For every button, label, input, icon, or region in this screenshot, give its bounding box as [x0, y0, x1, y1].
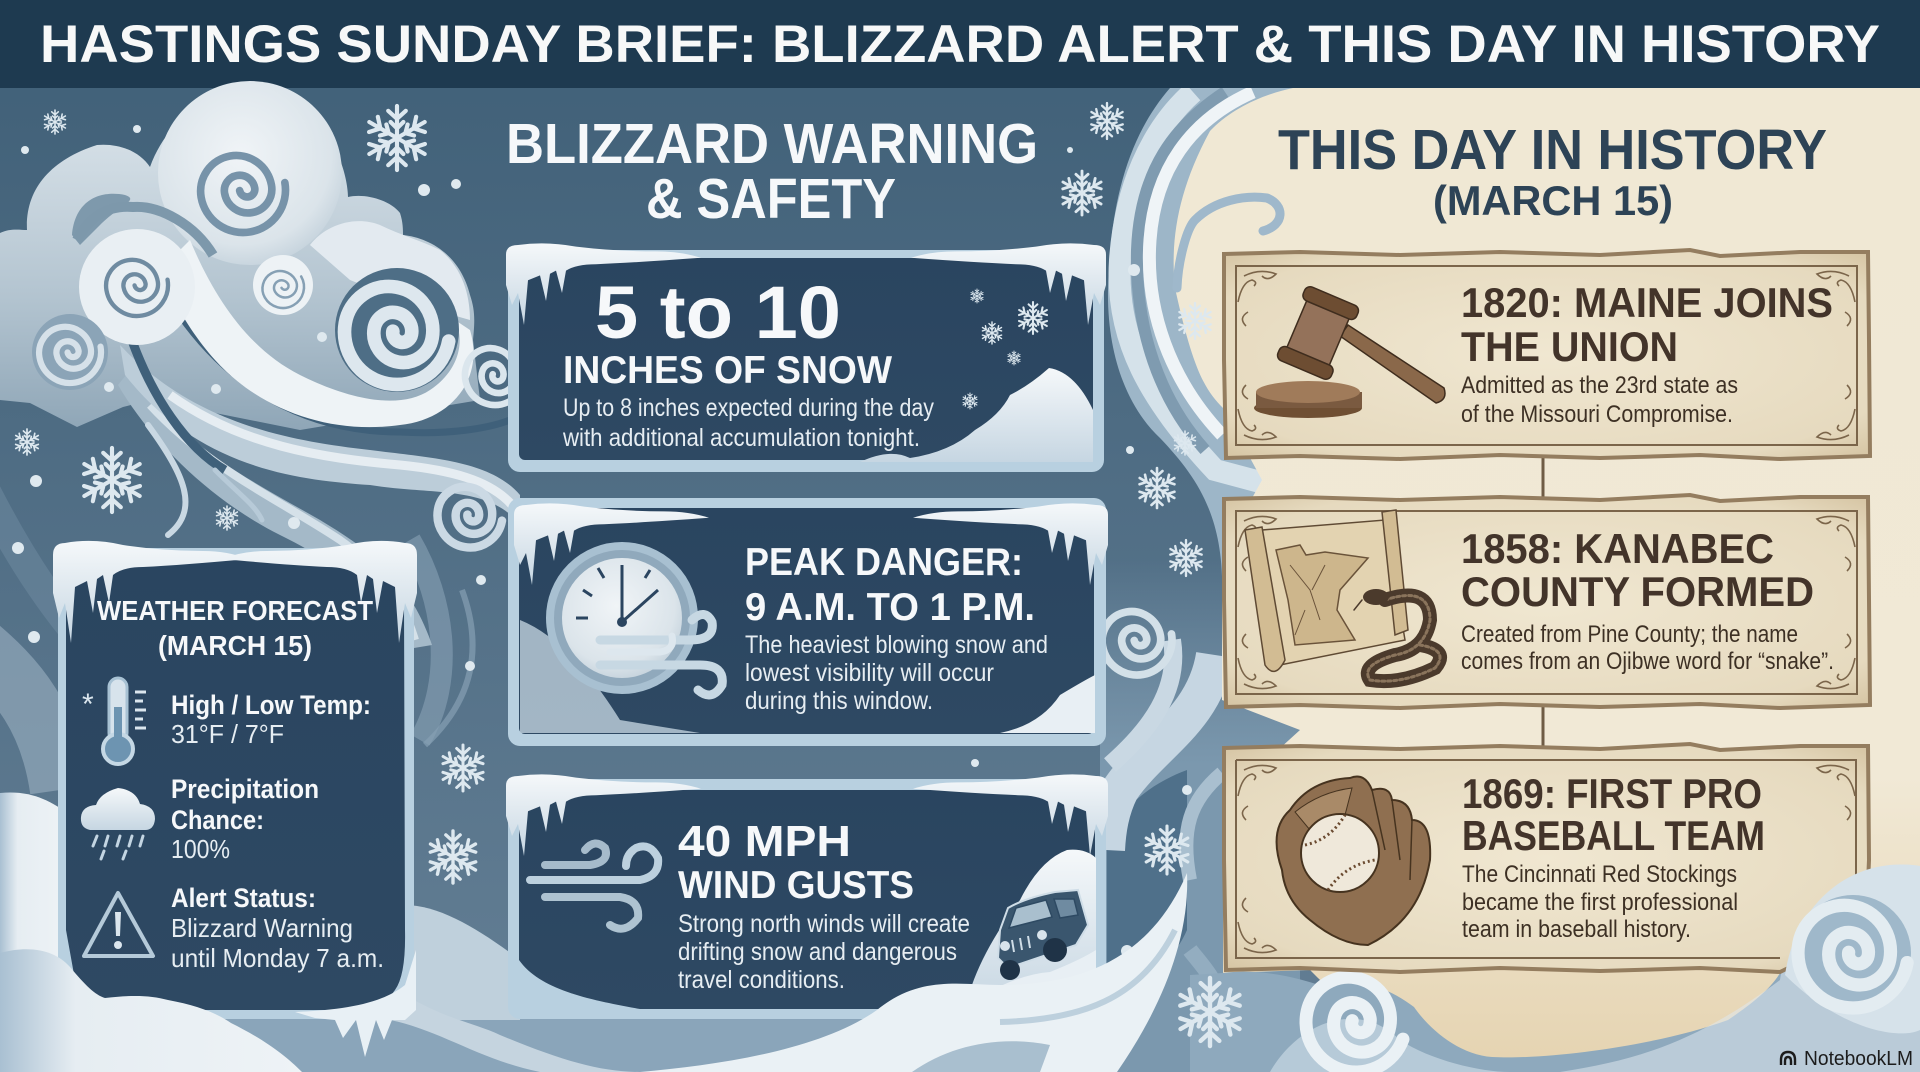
text: alert status: Alert Status: — [171, 883, 316, 913]
body text — [1462, 861, 1738, 943]
body text — [678, 910, 970, 994]
panel: weather forecast — [53, 541, 417, 1057]
text: alert status — [171, 883, 384, 973]
parchment background — [1174, 88, 1920, 1072]
body text: team in baseball history. — [1462, 916, 1691, 943]
body text: lowest visibility will occur — [745, 659, 994, 687]
heading: COUNTY FORMED — [1461, 568, 1814, 615]
card frame — [508, 498, 1106, 746]
heading: this day in history — [1278, 118, 1827, 224]
icon: thermometer: * — [82, 688, 94, 721]
icon: wind — [530, 843, 658, 929]
heading: date: (MARCH 15) — [158, 630, 312, 661]
plaque — [1224, 744, 1869, 972]
card frame — [508, 250, 1104, 472]
bottom right waves — [1190, 866, 1920, 1072]
text: temperature — [171, 690, 371, 749]
foreground snow swoosh — [640, 873, 1244, 1072]
dark outlines — [72, 194, 130, 245]
icon: snake — [1354, 589, 1440, 681]
body text — [1461, 372, 1738, 428]
panel frame — [58, 548, 414, 1019]
heading: 1858: KANABEC — [1461, 525, 1774, 572]
plaque — [1224, 250, 1870, 459]
heading: 9 A.M. TO 1 P.M. — [745, 586, 1035, 629]
body text: drifting snow and dangerous — [678, 938, 957, 966]
icon: rain cloud — [81, 788, 155, 859]
title: HASTINGS SUNDAY BRIEF: BLIZZARD ALERT & THIS DAY IN HISTORY — [40, 15, 1880, 74]
panel: 1869 baseball — [1224, 744, 1869, 972]
background wind streaks on the left — [0, 480, 473, 790]
snowflake cluster — [962, 289, 1049, 409]
icon: map scroll — [1245, 510, 1408, 671]
panel: 1858 Kanabec — [1224, 495, 1870, 708]
icon: baseball glove — [1277, 776, 1430, 945]
body text: The Cincinnati Red Stockings — [1462, 861, 1737, 888]
text: precipitation: Precipitation — [171, 774, 319, 804]
swirl on parchment — [1177, 197, 1280, 288]
snow band on the right — [1097, 88, 1300, 1072]
small swirl curls beside the cards — [432, 341, 532, 553]
snowflakes — [14, 103, 1213, 883]
falling snow dots — [12, 125, 1192, 957]
panel: wind gusts card — [506, 774, 1108, 1019]
panel: snowfall card — [506, 243, 1106, 472]
heading — [1461, 525, 1814, 615]
heading: PEAK DANGER: — [745, 541, 1023, 584]
body text: became the first professional — [1462, 889, 1738, 916]
body text: comes from an Ojibwe word for “snake”. — [1461, 648, 1834, 675]
text: alert status: until Monday 7 a.m. — [171, 943, 384, 973]
body text: The heaviest blowing snow and — [745, 631, 1048, 659]
plaque — [1224, 495, 1870, 708]
text: temperature: 31°F / 7°F — [171, 719, 284, 749]
icon: warning triangle — [84, 893, 153, 956]
heading: this day in history: (MARCH 15) — [1433, 177, 1673, 224]
body text: of the Missouri Compromise. — [1461, 401, 1733, 428]
heading — [678, 817, 914, 907]
heading: 1820: MAINE JOINS — [1461, 279, 1833, 326]
text: precipitation — [171, 774, 319, 864]
heading: weather forecast: WEATHER FORECAST — [97, 595, 373, 626]
subheading: INCHES OF SNOW — [563, 349, 892, 392]
cloud curls — [79, 229, 195, 345]
icon: clock with wind — [550, 546, 722, 695]
body text — [1461, 621, 1834, 675]
body text: Created from Pine County; the name — [1461, 621, 1798, 648]
panel: peak danger card — [508, 498, 1108, 746]
body text: Up to 8 inches expected during the day — [563, 394, 934, 422]
illustration: swirling blizzard cloud — [0, 81, 520, 650]
heading — [745, 541, 1035, 629]
snow stream bands — [118, 370, 432, 650]
text: temperature: High / Low Temp: — [171, 690, 371, 720]
timeline connector — [1542, 456, 1544, 748]
header bar — [0, 0, 1920, 88]
heading: blizzard warning: BLIZZARD WARNING — [506, 112, 1038, 176]
text: precipitation: 100% — [171, 834, 230, 864]
main snow stream — [160, 240, 474, 427]
text: alert status: Blizzard Warning — [171, 913, 353, 943]
big number: 5 to 10 — [595, 271, 841, 354]
icon: thermometer — [82, 678, 146, 764]
illustration: snow pile — [860, 368, 1093, 462]
heading: BASEBALL TEAM — [1462, 812, 1765, 859]
heading: blizzard warning: & SAFETY — [646, 167, 896, 231]
card frame — [508, 779, 1106, 1019]
heading: 1869: FIRST PRO — [1462, 770, 1762, 817]
body text: Strong north winds will create — [678, 910, 970, 938]
body text: travel conditions. — [678, 966, 845, 994]
text: precipitation: Chance: — [171, 805, 264, 835]
heading: WIND GUSTS — [678, 864, 914, 907]
panel: 1820 Maine — [1224, 250, 1870, 459]
illustration: snow drift and jeep — [960, 850, 1096, 1010]
heading: blizzard warning — [506, 112, 1038, 231]
bottom ice and icicles — [295, 950, 416, 1057]
heading — [1462, 770, 1765, 859]
body text — [562, 394, 934, 452]
snow corners — [520, 620, 700, 733]
snow curl over plaque corner — [1785, 864, 1920, 1033]
icon: gavel — [1254, 285, 1445, 418]
cloud silhouette — [0, 97, 480, 430]
heading — [1461, 279, 1833, 370]
heading: this day in history: THIS DAY IN HISTORY — [1278, 118, 1827, 182]
heading: THE UNION — [1461, 323, 1678, 370]
body text: during this window. — [745, 687, 933, 715]
snow drifts beside the weather panel — [0, 792, 900, 1072]
body text: Admitted as the 23rd state as — [1461, 372, 1738, 399]
body text: with additional accumulation tonight. — [562, 424, 920, 452]
foreground snow mound left — [0, 949, 302, 1072]
body text — [745, 631, 1048, 715]
watermark: NotebookLM: NotebookLM — [1804, 1048, 1913, 1070]
heading: 40 MPH — [678, 817, 851, 866]
